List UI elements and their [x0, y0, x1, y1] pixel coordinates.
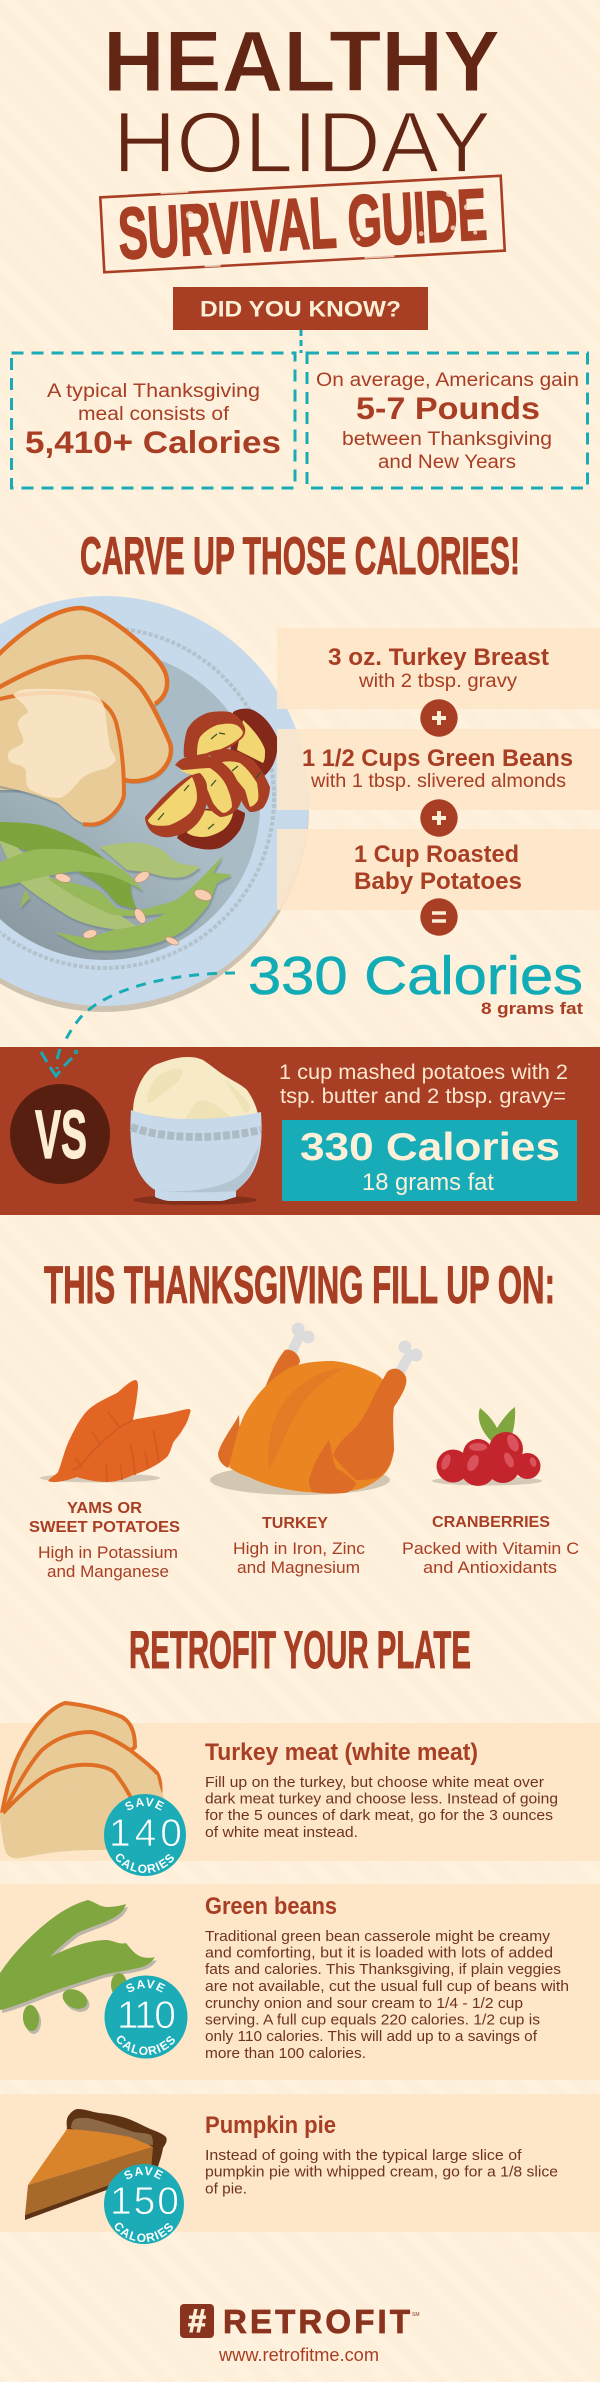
icon: pumpkin pie slice: [25, 2109, 167, 2220]
text: cranberries label: and Antioxidants: [423, 1558, 557, 1577]
green beans: [0, 822, 232, 951]
text: turkey label: [233, 1515, 366, 1577]
badge: VS: [10, 1084, 110, 1184]
badge: save 110 calories: SAVE: [126, 1980, 166, 1992]
text: cranberries label: Packed with Vitamin C: [402, 1539, 579, 1558]
panel: green beans item: with 1 tbsp. slivered almonds: [310, 771, 566, 792]
illustration: roast turkey: [210, 1322, 422, 1495]
text: mashed potatoes description: 1 cup mashed potatoes with 2: [279, 1061, 568, 1084]
text: pumpkin pie tip copy: pumpkin pie with whipped cream, go for a 1/8 slice: [205, 2164, 558, 2180]
panel: typical meal fact: [12, 353, 295, 488]
illustration: bowl of mashed potatoes: [130, 1057, 262, 1205]
text: turkey tip copy: of white meat instead.: [205, 1824, 358, 1841]
callout: 330 calories mashed potatoes: [282, 1120, 577, 1201]
stamp: Survival Guide: [100, 173, 505, 276]
panel: weight gain fact: [307, 353, 588, 488]
text: pumpkin pie tip copy: [205, 2112, 558, 2198]
badge: save 110 calories: 110: [117, 1994, 176, 2037]
text: green beans tip copy: fats and calories. This Thanksgiving, if plain veggies: [205, 1961, 561, 1978]
text: green beans tip copy: only 110 calories. This will add up to a savings of: [205, 2028, 538, 2045]
badge: save 140 calories: [104, 1794, 186, 1876]
text: turkey label: TURKEY: [262, 1515, 328, 1532]
title: Healthy Holiday: [103, 14, 500, 191]
badge: save 140 calories: CALORIES: [116, 1854, 174, 1874]
text: mashed potatoes description: tsp. butter and 2 tbsp. gravy=: [280, 1085, 566, 1108]
logo: Retrofit: SM: [412, 2312, 420, 2318]
text: yams label: [29, 1500, 180, 1581]
panel: turkey meat tip: [0, 1701, 600, 1876]
callout: 330 calories mashed potatoes: 330 Calories: [300, 1126, 560, 1169]
panel: typical meal fact: 5,410+ Calories: [25, 424, 281, 460]
icon: equals: [420, 898, 458, 936]
text: pumpkin pie tip copy: Pumpkin pie: [205, 2112, 336, 2139]
panel: roasted potatoes item: [277, 829, 600, 910]
text: green beans tip copy: are not available, cut the usual full cup of beans with: [205, 1978, 569, 1995]
panel: turkey breast item: 3 oz. Turkey Breast: [328, 644, 549, 671]
panel: typical meal fact: A typical Thanksgiving: [47, 381, 260, 402]
text: yams label: YAMS OR: [67, 1500, 142, 1517]
text: turkey label: and Magnesium: [237, 1558, 360, 1577]
text: yams label: and Manganese: [47, 1562, 169, 1581]
badge: save 150 calories: 150: [110, 2180, 179, 2223]
text: green beans tip copy: crunchy onion and sour cream to 1/4 - 1/2 cup: [205, 1995, 523, 2012]
badge: save 140 calories: SAVE: [125, 1798, 164, 1810]
panel: weight gain fact: between Thanksgiving: [342, 429, 552, 450]
icon: green beans: [0, 1900, 157, 2035]
text: yams label: SWEET POTATOES: [29, 1519, 180, 1536]
text: green beans tip copy: Green beans: [205, 1893, 337, 1920]
text: yams label: High in Potassium: [38, 1543, 178, 1562]
callout: 330 calories plate total: 330 Calories: [248, 946, 583, 1006]
title: Healthy Holiday: HOLIDAY: [113, 95, 491, 191]
text: turkey tip copy: dark meat turkey and choose less. Instead of going: [205, 1790, 558, 1808]
icon: turkey slices: [0, 1703, 165, 1858]
text: green beans tip copy: [205, 1893, 569, 2062]
text: turkey tip copy: Turkey meat (white meat): [205, 1739, 478, 1766]
badge: save 150 calories: CALORIES: [114, 2222, 173, 2242]
panel: pumpkin pie tip: [0, 2094, 600, 2244]
badge: VS: VS: [35, 1096, 87, 1173]
callout: 330 calories mashed potatoes: 18 grams fat: [362, 1169, 494, 1196]
text: turkey tip copy: for the 5 ounces of dark meat, go for the 3 ounces: [205, 1807, 553, 1824]
badge: save 140 calories: 140: [109, 1812, 182, 1855]
text: turkey tip copy: [205, 1739, 558, 1841]
badge: save 110 calories: CALORIES: [116, 2036, 175, 2056]
connector: dashed line to fact boxes: [300, 330, 302, 353]
text: cranberries label: [402, 1514, 579, 1577]
icon: plus: [420, 799, 458, 837]
turkey slices on plate: [0, 608, 171, 825]
logo: Retrofit: #: [188, 2303, 206, 2339]
gravy: [8, 689, 116, 798]
panel: roasted potatoes item: 1 Cup Roasted: [354, 841, 519, 868]
panel: green beans tip: [0, 1884, 600, 2080]
panel: green beans item: 1 1/2 Cups Green Beans: [302, 745, 573, 772]
panel: typical meal fact: meal consists of: [78, 404, 230, 425]
panel: weight gain fact: 5-7 Pounds: [356, 390, 540, 426]
text: green beans tip copy: Traditional green bean casserole might be creamy: [205, 1928, 551, 1945]
icon: plus: [420, 699, 458, 737]
almond slices: [54, 869, 213, 947]
text: cranberries label: CRANBERRIES: [432, 1514, 550, 1531]
illustration: dinner plate: [0, 596, 309, 1012]
text: green beans tip copy: more than 100 calories.: [205, 2045, 366, 2062]
illustration: sweet potatoes: [40, 1380, 191, 1482]
panel: green beans item: [277, 729, 600, 810]
text: pumpkin pie tip copy: Instead of going with the typical large slice of: [205, 2147, 522, 2164]
text: turkey label: High in Iron, Zinc: [233, 1539, 366, 1558]
text: website: www.retrofitme.com: [218, 2345, 379, 2365]
badge: save 110 calories: [104, 1976, 188, 2058]
text: green beans tip copy: serving. A full cup equals 220 calories. 1/2 cup is: [205, 2012, 540, 2028]
potato wedges: [145, 709, 277, 850]
banner: Did you know: [173, 287, 428, 330]
title: Healthy Holiday: HEALTHY: [103, 14, 500, 110]
text: turkey tip copy: Fill up on the turkey, but choose white meat over: [205, 1774, 544, 1791]
panel: turkey breast item: with 2 tbsp. gravy: [358, 671, 518, 692]
badge: save 150 calories: [104, 2164, 184, 2244]
text: green beans tip copy: and comforting, but it is loaded with lots of added: [205, 1944, 553, 1962]
badge: save 150 calories: SAVE: [124, 2166, 164, 2180]
panel: roasted potatoes item: Baby Potatoes: [354, 868, 522, 895]
arrow: dashed line from plate to VS: [41, 973, 235, 1076]
text: mashed potatoes description: [279, 1061, 568, 1108]
text: pumpkin pie tip copy: of pie.: [205, 2180, 247, 2198]
panel: turkey breast item: [277, 628, 600, 709]
banner: Did you know: DID YOU KNOW?: [200, 296, 401, 322]
logo: Retrofit: RETROFIT: [223, 2303, 410, 2340]
panel: weight gain fact: On average, Americans gain: [316, 370, 579, 391]
band: mashed potatoes comparison: [0, 1047, 600, 1215]
panel: weight gain fact: and New Years: [378, 452, 516, 473]
callout: 330 calories plate total: 8 grams fat: [481, 999, 583, 1018]
illustration: cranberries: [432, 1407, 542, 1486]
